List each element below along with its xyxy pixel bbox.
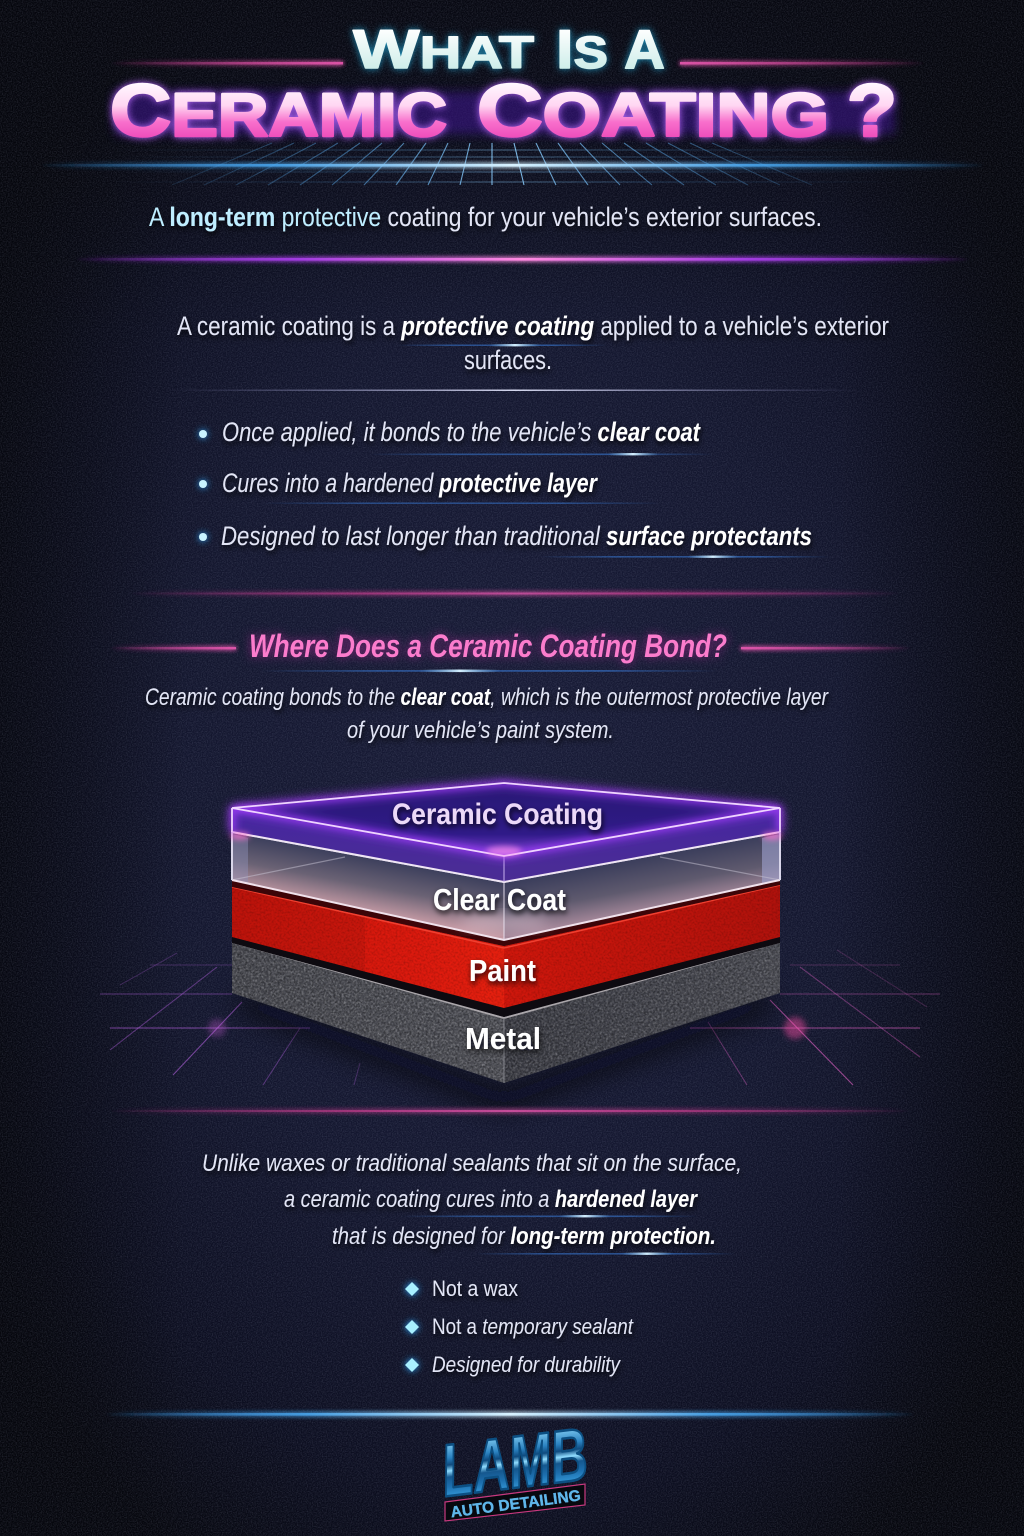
label: clear coat: Clear Coat xyxy=(433,882,566,917)
title neon grid and horizon line xyxy=(40,143,985,185)
ceramic coating layer xyxy=(230,783,782,882)
closing paragraph: a ceramic coating cures into a hardened layer xyxy=(284,1186,698,1213)
section description xyxy=(145,684,829,744)
section description: of your vehicle’s paint system. xyxy=(347,717,614,744)
diamond list xyxy=(405,1276,634,1377)
title line two: ? xyxy=(847,69,897,152)
item: not a wax xyxy=(405,1276,519,1301)
title line two: CERAMIC xyxy=(110,69,447,152)
section description: Ceramic coating bonds to the clear coat, which is the outermost protective layer xyxy=(145,684,829,711)
gap shadow between paint and metal xyxy=(232,934,780,1017)
bullet two: Cures into a hardened protective layer xyxy=(222,468,598,498)
divider: pink xyxy=(130,592,900,594)
layer stack diagram xyxy=(230,783,782,1110)
item: not a wax: Not a wax xyxy=(432,1276,519,1301)
dark band above paint xyxy=(232,880,780,946)
title line one with side rules: IS xyxy=(556,18,608,80)
neon floor grid xyxy=(100,950,940,1085)
ground shadow xyxy=(240,990,770,1110)
label: metal: Metal xyxy=(465,1021,541,1056)
subtitle: A long-term protective coating for your vehicle’s exterior surfaces. xyxy=(149,202,822,232)
bullet three: Designed to last longer than traditional surface protectants xyxy=(221,521,812,551)
divider: blue footer xyxy=(105,1413,915,1416)
bullet one: Once applied, it bonds to the vehicle’s clear coat xyxy=(222,417,701,447)
divider: pale rule xyxy=(170,390,860,391)
clear coat layer xyxy=(232,832,780,940)
paint layer xyxy=(232,885,780,1008)
metal layer xyxy=(232,942,780,1083)
title line one with side rules: A xyxy=(624,18,665,80)
closing paragraph xyxy=(202,1150,742,1255)
intro paragraph xyxy=(177,311,889,375)
logo wordmark: LAMB xyxy=(437,1412,592,1512)
closing paragraph: Unlike waxes or traditional sealants that sit on the surface, xyxy=(202,1150,742,1177)
bullet list: clear coat bond xyxy=(199,417,830,558)
label: ceramic coating: Ceramic Coating xyxy=(392,798,603,831)
divider: purple pink glow xyxy=(75,258,970,261)
item: designed for durability: Designed for durability xyxy=(432,1352,621,1377)
logo badge: AUTO DETAILING xyxy=(450,1487,582,1521)
title line two: COATING xyxy=(477,69,829,152)
intro paragraph: surfaces. xyxy=(464,345,552,375)
label: paint: Paint xyxy=(469,953,536,988)
title line one with side rules xyxy=(110,18,925,80)
logo: lamb auto detailing xyxy=(437,1412,592,1521)
title: what is a ceramic coating xyxy=(110,18,925,152)
title line one with side rules: W HAT xyxy=(353,18,534,80)
item: not a temporary sealant: Not a temporary sealant xyxy=(432,1314,634,1339)
section heading: where does a ceramic coating bond: Where Does a Ceramic Coating Bond? xyxy=(249,628,727,664)
divider: pink lower xyxy=(110,1110,910,1112)
intro paragraph: A ceramic coating is a protective coating applied to a vehicle’s exterior xyxy=(177,311,889,341)
closing paragraph: that is designed for long-term protection. xyxy=(332,1223,716,1250)
title line two xyxy=(110,69,897,152)
